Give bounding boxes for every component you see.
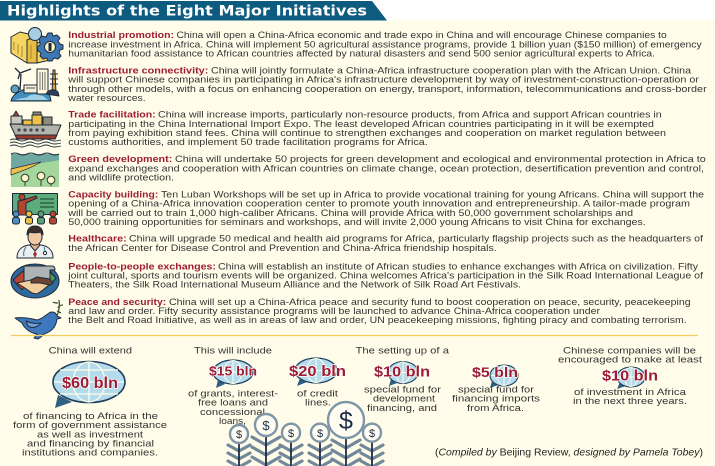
text: $60 bln description: of financing to Africa in the	[23, 411, 158, 422]
callout: $10 bln investment bubble: $10 bln	[602, 368, 658, 385]
callout: $15 bln bubble: $15 bln	[209, 364, 257, 379]
icon: buildings and gear	[11, 28, 63, 63]
icon: peace dove	[15, 300, 63, 339]
initiative: trade facilitation: participating in the China International Import Expo. The least developed African countries participating in it will be exempted	[68, 119, 654, 130]
initiative: green development: China will undertake 50 projects for green development and ecological and environmental protection in Africa to	[175, 154, 706, 165]
icon: doctor	[17, 226, 53, 258]
initiative: green development: and wildlife protection.	[68, 172, 174, 184]
text: $60 bln description: institutions and companies.	[22, 448, 158, 458]
initiative: industrial promotion: Industrial promotion:	[68, 30, 174, 41]
text: China will extend: China will extend	[49, 346, 132, 357]
callout: $20 bln bubble: $20 bln	[289, 363, 346, 380]
callout: $60 bln globe bubble: $60 bln	[62, 375, 118, 392]
text: $20 bln description	[297, 389, 338, 409]
icon: handshake	[11, 264, 59, 298]
text: $20 bln description: lines.	[305, 398, 331, 409]
text: Chinese companies intro	[558, 346, 702, 366]
initiative: capacity building: Capacity building:	[68, 190, 158, 201]
initiative: industrial promotion: China will open a China-Africa economic and trade expo in China and will encourage Chinese companies to	[176, 30, 667, 41]
callout: $10 bln development bubble	[374, 362, 430, 386]
initiative: industrial promotion: humanitarian food assistance to African countries affected by natural disasters and send 500 senior agricultural experts to Africa.	[68, 48, 655, 60]
callout: $15 bln bubble	[209, 360, 257, 388]
text: $60 bln description: form of government assistance	[13, 420, 167, 431]
initiative: peace and security: the Belt and Road Initiative, as well as in areas of law and order, UN peacekeeping missions, fighting piracy and combating terrorism.	[68, 315, 687, 326]
initiative: trade facilitation	[68, 110, 666, 148]
callout: $20 bln bubble	[289, 358, 346, 386]
initiative: green development: expand exchanges and cooperation with African countries on climate change, ocean protection, desertification prevention and control,	[68, 164, 704, 174]
initiative: infrastructure connectivity: water resources.	[67, 93, 146, 104]
icon: green landscape	[11, 153, 59, 187]
initiative: trade facilitation: China will increase imports, particularly non-resource products, from Africa and support African countries in	[158, 110, 662, 121]
text: $5 bln description	[452, 384, 540, 414]
text: $5 bln description: special fund for	[458, 384, 534, 395]
icon: infrastructure and wind turbine	[11, 68, 59, 101]
text: $60 bln description: and financing by financial	[27, 438, 154, 450]
text: investment description	[573, 387, 687, 407]
initiative: infrastructure connectivity: Infrastructure connectivity:	[68, 66, 208, 76]
initiative: capacity building: opening of a China-Africa innovation cooperation center to promote youth innovation and entrepreneurship. A tailor-made program	[68, 199, 690, 210]
initiative: healthcare	[68, 234, 703, 254]
initiative: infrastructure connectivity: through other models, with a focus on enhancing cooperation on energy, transport, information, telecommunications and cross-border	[68, 84, 707, 95]
text: Chinese companies intro: encouraged to make at least	[558, 355, 702, 366]
callout: $60 bln globe bubble	[53, 362, 125, 408]
illustration: money flowers: $	[339, 407, 353, 435]
credit line: (Compiled by Beijing Review, designed by Pamela Tobey)	[435, 447, 703, 459]
callout: $5 bln bubble	[472, 364, 518, 388]
title banner: Highlights of the Eight Major Initiatives	[7, 4, 367, 20]
initiative: peace and security	[68, 297, 691, 326]
illustration: money flowers	[228, 402, 383, 466]
icon: classroom	[12, 194, 58, 224]
initiative: peace and security: Peace and security:	[68, 297, 166, 308]
initiative: capacity building	[67, 190, 704, 228]
text: Chinese companies intro: Chinese companies will be	[563, 346, 696, 357]
text: investment description: in the next three years.	[573, 396, 687, 407]
illustration: money flowers: $	[236, 429, 242, 441]
text: The setting up of a: The setting up of a	[356, 346, 450, 357]
initiative: people-to-people exchanges	[67, 261, 703, 291]
illustration: money flowers: $	[288, 428, 294, 440]
initiative: industrial promotion: increase investment in Africa. China will implement 50 agricultural assistance programs, provide 1 billion yuan ($150 million) of emergency	[68, 39, 702, 50]
text: $15 bln description	[188, 389, 278, 427]
illustration: money flowers: $	[262, 418, 270, 433]
initiative: healthcare: Healthcare:	[68, 234, 127, 245]
callout: $10 bln development bubble: $10 bln	[374, 364, 430, 381]
text: $60 bln description	[13, 411, 167, 458]
initiative: capacity building: will be carried out to train 1,000 high-caliber Africans. China will provide Africa with 50,000 government scholarships and	[67, 208, 633, 219]
text: $5 bln description: financing imports	[452, 394, 540, 405]
callout: $5 bln bubble: $5 bln	[472, 364, 518, 380]
initiative: people-to-people exchanges: joint cultural, sports and tourism events will be organized. China welcomes Africa's participation in the Silk Road International League of	[67, 270, 703, 282]
text: $15 bln description: of grants, interest-	[188, 389, 278, 400]
initiative: trade facilitation: customs authorities, and implement 50 trade facilitation programs for Africa.	[68, 137, 428, 148]
text: $5 bln description: from Africa.	[467, 403, 524, 414]
illustration: money flowers: $	[369, 428, 375, 440]
initiative: trade facilitation: from paying exhibition stand fees. China will continue to strengthen exchanges and cooperation on market regulation between	[68, 128, 666, 139]
initiative: green development	[68, 154, 706, 184]
text: $10 bln development description: development	[373, 394, 435, 405]
initiative: infrastructure connectivity: will support Chinese companies in participating in Africa's infrastructure development by way of investment-construction-operation or	[67, 75, 699, 86]
text: $15 bln description: free loans and	[198, 398, 268, 409]
initiative: capacity building: 50,000 training opportunities for seminars and workshops, and will invite 2,000 young Africans to visit China for exchanges.	[68, 217, 646, 228]
initiative: peace and security: China will set up a China-Africa peace and security fund to boost cooperation on peace, security, peacekeeping	[169, 297, 691, 308]
title banner	[0, 1, 387, 20]
initiative: peace and security: and law and order. Fifty security assistance programs will be launched to advance China-Africa cooperation under	[68, 306, 600, 317]
initiative: industrial promotion	[68, 30, 702, 60]
text: $10 bln development description: financing, and	[367, 403, 437, 414]
text: $10 bln development description: special fund for	[364, 384, 441, 395]
initiative: infrastructure connectivity: China will jointly formulate a China-Africa infrastructure cooperation plan with the African Union. China	[211, 66, 692, 76]
initiative: people-to-people exchanges: People-to-people exchanges:	[68, 261, 216, 272]
initiative: infrastructure connectivity	[67, 66, 707, 104]
text: This will include: This will include	[194, 346, 272, 357]
initiative: green development: Green development:	[68, 154, 172, 165]
text: $15 bln description: concessional	[200, 407, 265, 418]
initiative: people-to-people exchanges: China will establish an institute of African studies to enhance exchanges with Africa on civilization. Fifty	[218, 261, 698, 272]
text: $60 bln description: as well as investment	[37, 430, 143, 440]
initiative: trade facilitation: Trade facilitation:	[68, 110, 156, 121]
icon: container ship	[10, 111, 61, 147]
initiative: healthcare: China will upgrade 50 medical and health aid programs for Africa, particularly flagship projects such as the headquarters of	[129, 234, 703, 245]
text: $10 bln development description	[364, 384, 441, 414]
initiative: people-to-people exchanges: Theaters, the Silk Road International Museum Alliance and the Network of Silk Road Art Festivals.	[68, 280, 521, 291]
text: investment description: of investment in Africa	[574, 387, 687, 398]
illustration: money flowers: $	[317, 428, 323, 440]
text: $20 bln description: of credit	[297, 389, 338, 400]
initiative: capacity building: Ten Luban Workshops will be set up in Africa to provide vocational training for young Africans. China will support the	[161, 190, 704, 201]
initiative: healthcare: the African Center for Disease Control and Prevention and China-Africa friendship hospitals.	[68, 243, 497, 254]
text: $15 bln description: loans,	[219, 416, 246, 427]
